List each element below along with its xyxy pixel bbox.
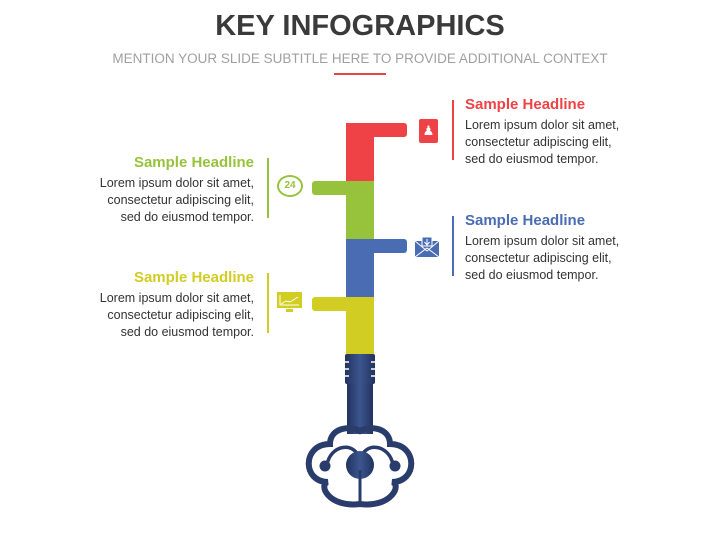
icon: 24h phone (277, 175, 303, 197)
text: Lorem ipsum dolor sit amet, (465, 234, 619, 248)
icon: contact book (419, 119, 438, 143)
text: Lorem ipsum dolor sit amet, (100, 291, 254, 305)
text block: blue (452, 216, 454, 276)
title: KEY INFOGRAPHICS (215, 10, 505, 42)
text block: yellow (267, 273, 269, 333)
icon: contact book: ♟ (423, 123, 434, 138)
text: sed do eiusmod tempor. (121, 325, 254, 339)
text: Lorem ipsum dolor sit amet, (100, 176, 254, 190)
icon: envelope (415, 238, 439, 257)
text: consectetur adipiscing elit, (107, 193, 254, 207)
icon: 24h phone: 24 (284, 180, 296, 191)
text: consectetur adipiscing elit, (465, 251, 612, 265)
text: consectetur adipiscing elit, (465, 135, 612, 149)
text: sed do eiusmod tempor. (121, 210, 254, 224)
text block: red (452, 100, 454, 160)
text: sed do eiusmod tempor. (465, 268, 598, 282)
text: consectetur adipiscing elit, (107, 308, 254, 322)
text: Sample Headline (134, 269, 254, 286)
text: Sample Headline (465, 212, 585, 229)
text: sed do eiusmod tempor. (465, 152, 598, 166)
icon: monitor chart (277, 292, 302, 312)
text block: green (267, 158, 269, 218)
text: Sample Headline (134, 154, 254, 171)
text: Sample Headline (465, 96, 585, 113)
text: Lorem ipsum dolor sit amet, (465, 118, 619, 132)
subtitle: MENTION YOUR SLIDE SUBTITLE HERE TO PROVIDE ADDITIONAL CONTEXT (112, 51, 608, 66)
